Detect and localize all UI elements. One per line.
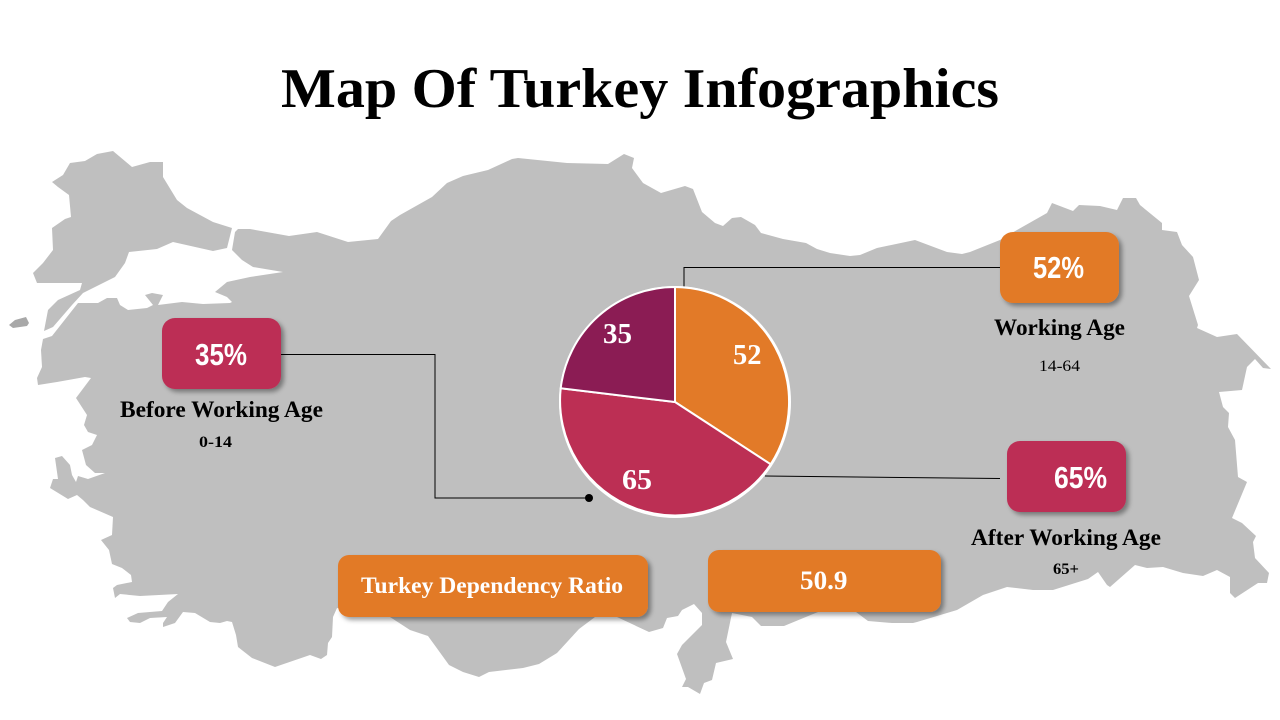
- box: ratio value: [708, 550, 941, 612]
- pie slice: 52: [675, 287, 789, 464]
- pie chart: [559, 286, 791, 518]
- pie slice: 65: [560, 388, 771, 515]
- callout: working age: 52%: [1033, 250, 1084, 285]
- title: Map Of Turkey Infographics: [281, 58, 999, 120]
- connector: after working age: [765, 476, 1000, 478]
- pie label: 35: 35: [603, 319, 632, 350]
- label: 0-14: 0-14: [199, 434, 232, 451]
- label: after working age: After Working Age: [971, 525, 1161, 550]
- pie label: 65: 65: [622, 465, 652, 496]
- box: ratio value: 50.9: [800, 566, 848, 595]
- map: small island: [9, 317, 29, 328]
- box: Turkey Dependency Ratio: Turkey Dependency Ratio: [361, 573, 623, 598]
- map: Thrace region: [33, 151, 232, 331]
- callout: before working age: 35%: [195, 337, 247, 372]
- map of Turkey: [9, 151, 1271, 694]
- connector: before working age: [281, 354, 593, 502]
- label: 65+: 65+: [1053, 561, 1079, 578]
- callout: working age: [994, 232, 1125, 375]
- label: 14-64: 14-64: [1039, 358, 1080, 375]
- connector: working age: [684, 268, 1000, 287]
- pie label: 52: 52: [733, 340, 762, 371]
- map: Anatolia region: [37, 154, 1271, 694]
- label: working age: Working Age: [994, 315, 1125, 340]
- callout: after working age: [971, 441, 1161, 578]
- callout: after working age: 65%: [1054, 460, 1107, 495]
- box: Turkey Dependency Ratio: [338, 555, 648, 617]
- label: before working age: Before Working Age: [120, 397, 323, 422]
- callout: before working age: [120, 318, 323, 451]
- pie slice: 35: [561, 287, 675, 402]
